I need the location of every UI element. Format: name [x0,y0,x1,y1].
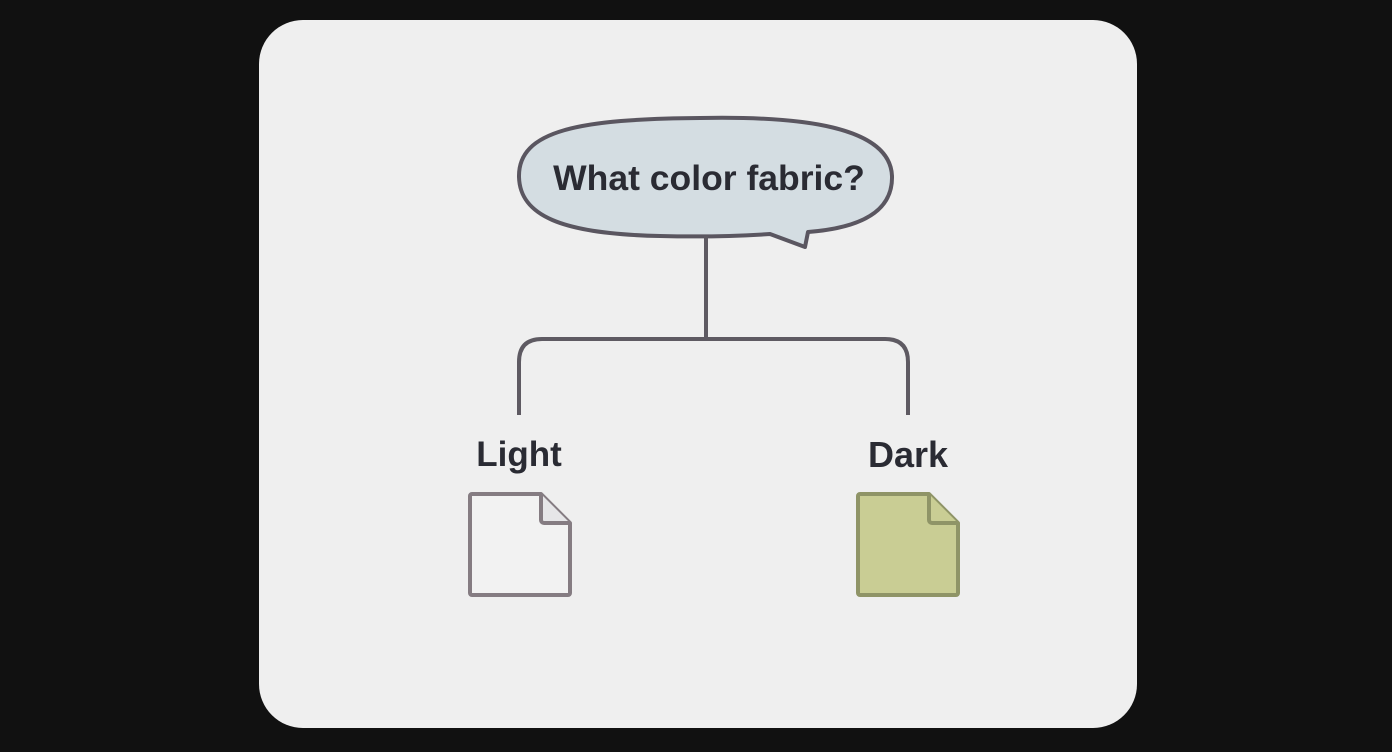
panel: card [259,20,1137,728]
question text: What color fabric? [553,158,865,198]
label: Light: Light [476,435,562,474]
speech bubble [519,118,892,247]
connector tree [519,236,908,415]
icon: dark fabric [858,494,958,595]
icon: light fabric [470,494,570,595]
label: Dark: Dark [868,434,949,475]
diagram [468,116,960,597]
